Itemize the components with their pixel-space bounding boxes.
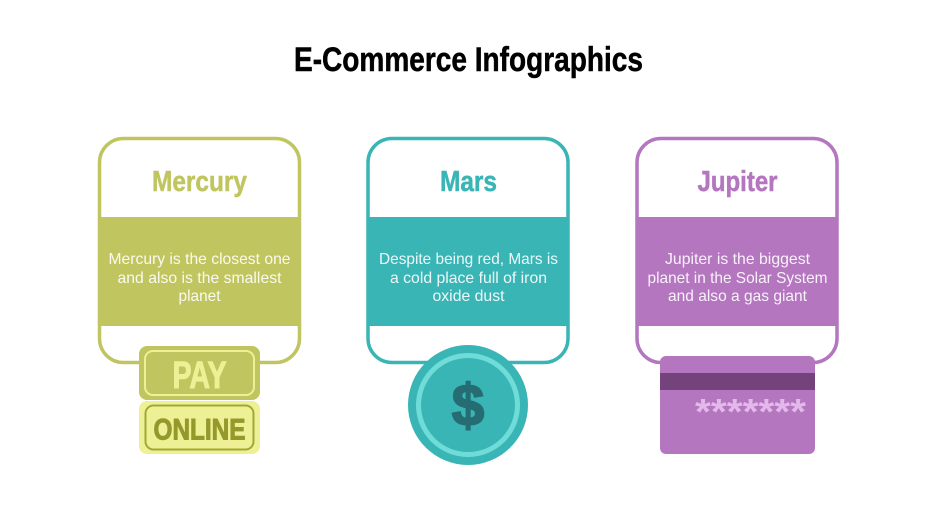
heading: Mars: Mars (440, 166, 497, 198)
body text: Jupiter (648, 251, 828, 305)
card outline: Mercury (100, 138, 300, 362)
body text: Jupiter: Jupiter is the biggest (665, 251, 811, 268)
title: E-Commerce Infographics (294, 41, 643, 79)
icon: pay online sign (139, 346, 260, 454)
icon: credit card: ******* (695, 391, 806, 432)
colour band: Mercury (98, 217, 301, 326)
card outline: Jupiter (637, 138, 837, 362)
heading: Jupiter: Jupiter (698, 166, 778, 198)
icon: dollar coin: $ (452, 373, 484, 438)
ONLINE plate: ONLINE (154, 414, 246, 446)
panel: Mars (366, 138, 570, 465)
body text: Mercury: and also is the smallest (118, 270, 282, 287)
colour band: Jupiter (636, 217, 838, 326)
PAY plate: PAY (172, 355, 226, 397)
panel: Mercury (98, 138, 301, 454)
panel: Jupiter (636, 138, 838, 454)
body text: Mars: a cold place full of iron (390, 270, 547, 287)
icon: dollar coin (408, 345, 528, 465)
body text: Mars: Despite being red, Mars is (379, 251, 558, 268)
card outline: Mars (368, 138, 568, 362)
body text: Mercury: planet (178, 288, 221, 305)
body text: Jupiter: and also a gas giant (668, 288, 808, 305)
heading: Mercury: Mercury (152, 166, 247, 198)
body text: Mars (379, 251, 558, 305)
body text: Mercury: Mercury is the closest one (108, 251, 290, 268)
body text: Mars: oxide dust (432, 288, 505, 305)
body text: Jupiter: planet in the Solar System (648, 270, 828, 287)
body text: Mercury (108, 251, 290, 305)
colour band: Mars (366, 217, 570, 326)
icon: credit card (660, 356, 815, 454)
